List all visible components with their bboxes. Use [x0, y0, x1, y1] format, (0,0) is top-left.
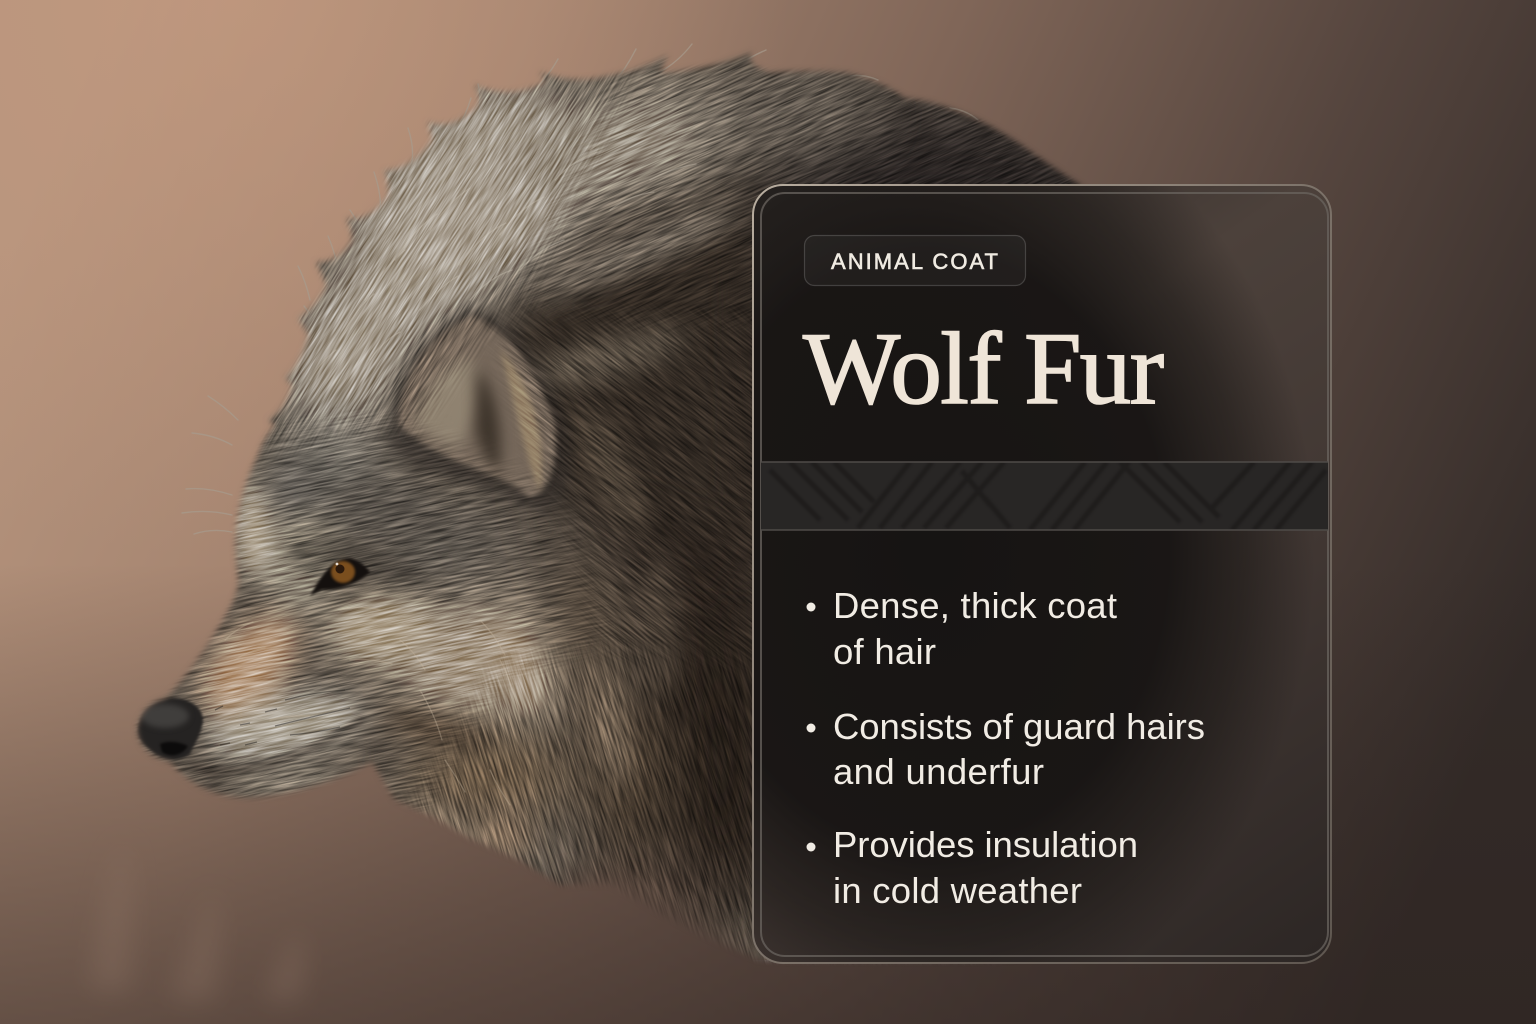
- bullet: guard hairs: Consists of guard hairs: [833, 706, 1205, 747]
- eye: [310, 558, 370, 596]
- fur texture: [136, 56, 1072, 964]
- card body: [753, 185, 1331, 963]
- dark brow stripe: [289, 537, 440, 590]
- chest and cheek strands: [225, 608, 520, 805]
- nose: [137, 698, 203, 760]
- badge: animal coat: ANIMAL COAT: [831, 249, 998, 274]
- title: Wolf Fur: [803, 312, 1164, 426]
- mane highlight strands: [310, 130, 696, 380]
- panel: info card: [753, 185, 1331, 963]
- bullet: insulation: [806, 824, 1138, 911]
- illustration: wolf head and mane: [134, 51, 1082, 963]
- bullet list: [806, 585, 1205, 911]
- bullet: insulation: Provides insulation: [833, 824, 1138, 865]
- bullet: insulation: in cold weather: [833, 870, 1082, 911]
- bullet: guard hairs: and underfur: [833, 751, 1044, 792]
- bullet: dense coat: of hair: [833, 631, 936, 672]
- card borders: [753, 185, 1331, 963]
- blurred foreground grass: [90, 840, 304, 1000]
- bullet: dense coat: Dense, thick coat: [833, 585, 1117, 626]
- fur colour masses: [182, 32, 1160, 940]
- bullet: dense coat: [806, 585, 1117, 672]
- ear: [387, 306, 570, 515]
- whisker dots: [215, 690, 350, 745]
- bullet: guard hairs: [806, 706, 1205, 792]
- woven pattern band: [761, 462, 1328, 530]
- mouth shadow: [195, 720, 362, 771]
- flyaway hairs: [182, 44, 978, 534]
- badge: animal coat: [804, 236, 1026, 286]
